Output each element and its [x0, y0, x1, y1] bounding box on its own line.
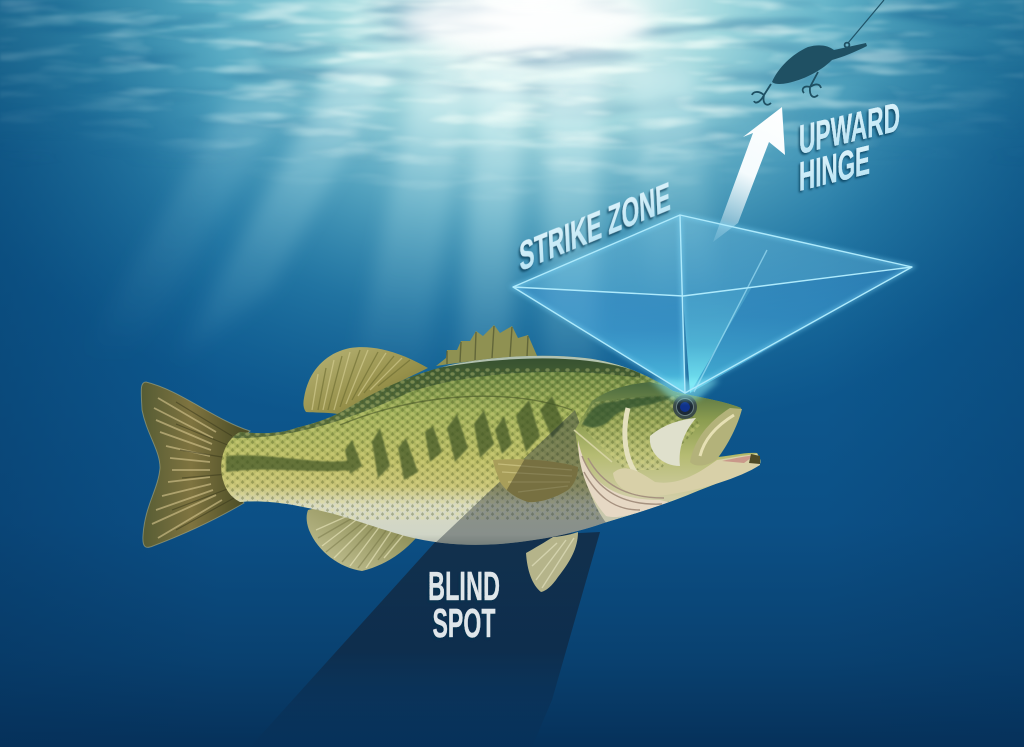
- water surface light ripples: [96, 0, 960, 193]
- sun glare at surface: [400, 0, 650, 50]
- arrow: upward hinge: [713, 107, 785, 242]
- illustration: largemouth bass: [141, 325, 770, 592]
- soft dorsal fin: [303, 347, 428, 414]
- fishing line: [848, 0, 884, 43]
- label: upward hinge: UPWARD: [799, 93, 900, 163]
- icon: fishing lure silhouette: [752, 43, 867, 105]
- water surface dark waves: [4, 0, 984, 136]
- fish body: [221, 356, 760, 545]
- head and gill cover: [574, 382, 762, 524]
- label: blind spot: [428, 563, 500, 646]
- gill stripes: [578, 440, 672, 517]
- spiny dorsal fin: [436, 325, 538, 366]
- ventral fin: [526, 532, 578, 592]
- blind spot shadow in water: [250, 532, 600, 747]
- mouth and jaws: [613, 408, 760, 496]
- label: upward hinge: HINGE: [799, 136, 870, 200]
- label: upward hinge: [799, 93, 900, 200]
- sun rays: [80, 60, 720, 440]
- anal fin: [307, 507, 417, 571]
- lateral blotches: [226, 396, 564, 480]
- tail fin: [141, 382, 250, 547]
- faint outer ripples: [0, 0, 1024, 125]
- pectoral fin: [493, 459, 578, 502]
- shadow across body: [430, 410, 620, 548]
- label: strike zone: STRIKE ZONE: [518, 173, 671, 280]
- eye: [673, 395, 697, 419]
- label: blind spot: BLIND: [428, 563, 500, 609]
- lateral line: [340, 396, 572, 425]
- label: blind spot: SPOT: [432, 600, 496, 646]
- chart: strike zone pyramid: [513, 215, 912, 400]
